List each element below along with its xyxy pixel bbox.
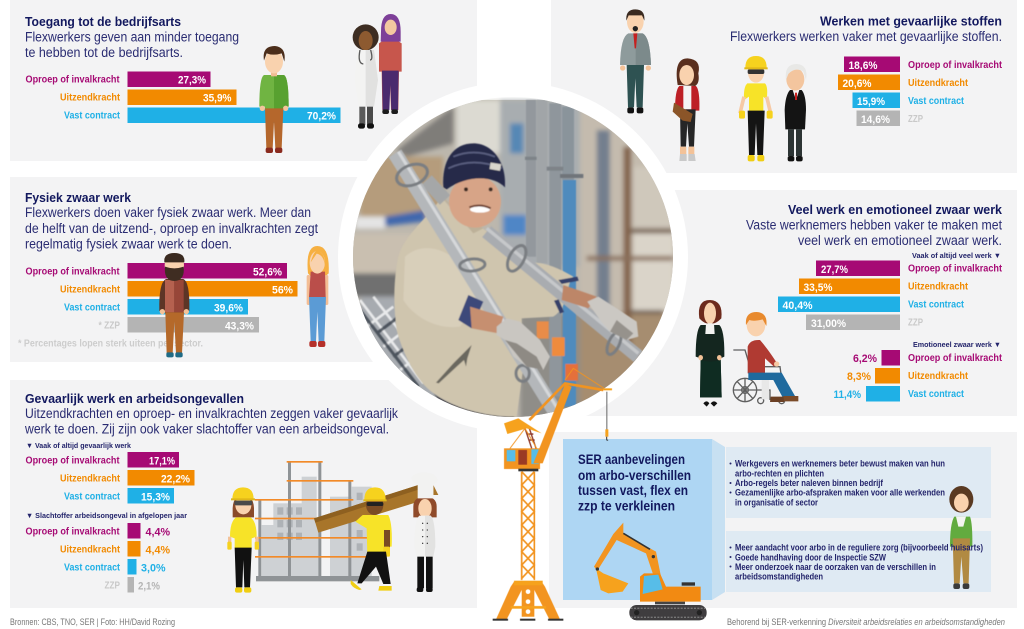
bar chart: gevaarlijke stoffen: Vast contract (908, 95, 964, 107)
figure: woman with green sweater (949, 486, 973, 589)
bar chart: vaak of altijd veel werk: Uitzendkracht (908, 280, 968, 292)
bar chart: fysiek zwaar werk: Uitzendkracht (60, 284, 120, 296)
bar chart: vaak of altijd gevaarlijk werk (26, 441, 194, 504)
bar chart: slachtoffer arbeidsongeval: Oproep of invalkracht (26, 526, 120, 538)
bar chart: fysiek zwaar werk: 43,3% (225, 320, 254, 332)
bar chart: slachtoffer arbeidsongeval: Uitzendkracht (60, 544, 120, 556)
bar chart: toegang bedrijfsarts: 70,2% (307, 110, 336, 122)
block: veel werk tekst (746, 202, 1003, 248)
figure: man in grey suit (620, 9, 651, 113)
bar chart: vaak of altijd gevaarlijk werk: 15,3% (141, 492, 170, 504)
list: aanbevelingen werkgevers: Arbo-regels beter naleven binnen bedrijf (735, 478, 884, 488)
white ring around photo (338, 82, 688, 432)
bar chart: emotioneel zwaar werk (834, 340, 1002, 402)
panel: fysiek zwaar werk (10, 177, 477, 362)
bar chart: slachtoffer arbeidsongeval: Vast contract (64, 562, 120, 574)
heading: SER aanbevelingen: SER aanbevelingen (578, 452, 685, 467)
bar chart: toegang bedrijfsarts: Oproep of invalkracht (26, 74, 120, 86)
list: aanbevelingen zorg en handhaving: arbeidsomstandigheden (735, 572, 823, 582)
bar chart: vaak of altijd gevaarlijk werk: Oproep of invalkracht (26, 454, 120, 466)
bar chart: emotioneel zwaar werk: Oproep of invalkracht (908, 352, 1002, 364)
bar chart: emotioneel zwaar werk: Vast contract (908, 388, 964, 400)
bar chart: fysiek zwaar werk: 39,6% (214, 302, 243, 314)
list: aanbevelingen zorg en handhaving: Meer aandacht voor arbo in de reguliere zorg (bijvoorbeeld huisarts) (735, 543, 983, 553)
bar chart: fysiek zwaar werk: * ZZP (98, 320, 120, 332)
bar chart: slachtoffer arbeidsongeval: ▼ Slachtoffer arbeidsongeval in afgelopen jaar (26, 511, 187, 520)
panel: SER aanbevelingen achtergrond (549, 432, 1017, 608)
figure: man in green sweater (259, 46, 289, 153)
panel: werken met gevaarlijke stoffen (551, 0, 1017, 173)
bar chart: slachtoffer arbeidsongeval: 4,4% (146, 526, 170, 538)
footer: bronnen: Bronnen: CBS, TNO, SER | Foto: HH/David Rozing (10, 617, 175, 627)
bar chart: vaak of altijd gevaarlijk werk: ▼ Vaak of altijd gevaarlijk werk (26, 441, 132, 450)
figure: woman with headscarf (379, 14, 402, 114)
bar chart: fysiek zwaar werk: 56% (272, 284, 293, 296)
bar chart: vaak of altijd gevaarlijk werk: Vast contract (64, 490, 120, 502)
block: toegang tot de bedrijfsarts tekst: te hebben tot de bedrijfsarts. (25, 45, 183, 60)
block: toegang tot de bedrijfsarts tekst: Flexwerkers geven aan minder toegang (25, 30, 239, 44)
bar chart: vaak of altijd veel werk: 40,4% (782, 300, 813, 312)
illustration: excavator (594, 523, 707, 620)
bar chart: slachtoffer arbeidsongeval: 4,4% (146, 544, 170, 556)
bar chart: vaak of altijd veel werk: Oproep of invalkracht (908, 262, 1002, 274)
heading: SER aanbevelingen: zzp te verkleinen (578, 498, 675, 514)
panel: veel werk en emotioneel zwaar werk (551, 190, 1017, 416)
bar chart: vaak of altijd veel werk: 31,00% (811, 318, 846, 330)
bar chart: emotioneel zwaar werk: 11,4% (834, 389, 861, 401)
bar chart: gevaarlijke stoffen: 20,6% (842, 78, 872, 90)
bar chart: fysiek zwaar werk: Vast contract (64, 302, 120, 314)
block: fysiek zwaar werk tekst: Fysiek zwaar werk (25, 190, 132, 205)
bar chart: gevaarlijke stoffen: 18,6% (848, 60, 878, 72)
bar chart: gevaarlijke stoffen: 15,9% (857, 96, 885, 108)
bar chart: gevaarlijke stoffen: Oproep of invalkracht (908, 59, 1002, 71)
bar chart: toegang bedrijfsarts: Uitzendkracht (60, 92, 120, 104)
bar chart: emotioneel zwaar werk: Uitzendkracht (908, 370, 968, 382)
figure: man in wheelchair (733, 312, 798, 404)
bar chart: fysiek zwaar werk: 52,6% (253, 266, 282, 278)
block: gevaarlijk werk tekst: Gevaarlijk werk en arbeidsongevallen (25, 391, 244, 406)
bar chart: toegang bedrijfsarts: 35,9% (203, 92, 232, 104)
panel: toegang tot de bedrijfsarts (10, 0, 477, 161)
list box 1 (726, 447, 991, 518)
bar chart: slachtoffer arbeidsongeval (26, 511, 187, 592)
bar chart: vaak of altijd veel werk: Vaak of altijd veel werk ▼ (912, 251, 1001, 260)
list: aanbevelingen werkgevers: Gezamenlijke arbo-afspraken maken voor alle werkenden (735, 488, 945, 498)
bar chart: slachtoffer arbeidsongeval: 3,0% (141, 562, 166, 574)
blue box: SER aanbevelingen (563, 439, 712, 600)
block: toegang tot de bedrijfsarts tekst (25, 14, 239, 60)
bar chart: slachtoffer arbeidsongeval: ZZP (104, 580, 120, 592)
block: gevaarlijke stoffen tekst: Werken met gevaarlijke stoffen (820, 14, 1002, 28)
list: aanbevelingen werkgevers: arbo-rechten en plichten (735, 468, 824, 478)
block: veel werk tekst: Veel werk en emotioneel zwaar werk (788, 202, 1003, 217)
figure: worker in yellow shirt (739, 56, 773, 161)
panel: gevaarlijk werk en arbeidsongevallen (10, 380, 477, 608)
figure: blonde woman (307, 246, 329, 347)
bar chart: vaak of altijd veel werk: ZZP (908, 316, 923, 328)
figure: woman with hard hat (227, 487, 259, 593)
block: veel werk tekst: veel werk en emotioneel zwaar werk. (798, 233, 1002, 248)
block: veel werk tekst: Vaste werknemers hebben vaker te maken met (746, 218, 1002, 232)
bar chart: gevaarlijke stoffen: ZZP (908, 113, 923, 125)
blue box arrow shape (712, 439, 725, 600)
bar chart: gevaarlijke stoffen: Uitzendkracht (908, 77, 968, 89)
list: aanbevelingen werkgevers (730, 459, 945, 508)
bar chart: slachtoffer arbeidsongeval: 2,1% (138, 580, 160, 592)
figure: judge woman in black robe (696, 300, 724, 407)
block: fysiek zwaar werk tekst: Flexwerkers doen vaker fysiek zwaar werk. Meer dan (25, 205, 311, 220)
photo: lachende bouwvakker met steigerbuizen (340, 100, 690, 420)
bar chart: gevaarlijke stoffen (838, 56, 1002, 126)
figure: worker carrying plank (351, 487, 392, 591)
bar chart: vaak of altijd gevaarlijk werk: 22,2% (161, 474, 190, 486)
bar chart: vaak of altijd gevaarlijk werk: 17,1% (149, 456, 175, 468)
bar chart: emotioneel zwaar werk: Emotioneel zwaar werk ▼ (913, 340, 1001, 349)
illustration: crane (493, 368, 612, 621)
bar chart: vaak of altijd veel werk: 27,7% (821, 264, 848, 276)
list box 2 (726, 531, 991, 592)
bar chart: toegang bedrijfsarts: 27,3% (178, 74, 206, 86)
bar chart: toegang bedrijfsarts (26, 72, 340, 123)
bar chart: vaak of altijd veel werk: Vast contract (908, 298, 964, 310)
heading: SER aanbevelingen: om arbo-verschillen (578, 468, 691, 483)
block: fysiek zwaar werk tekst (25, 190, 318, 252)
figure: elderly man in black coat (785, 64, 806, 161)
block: toegang tot de bedrijfsarts tekst: Toegang tot de bedrijfsarts (25, 14, 181, 29)
bar chart: vaak of altijd gevaarlijk werk: Uitzendkracht (60, 472, 120, 484)
illustration: gebouw en steiger (255, 461, 379, 581)
block: gevaarlijk werk tekst: werk te doen. Zij zijn ook vaker slachtoffer van een arbeidsongeval. (24, 422, 389, 436)
figure: chef (412, 472, 437, 592)
bar chart: emotioneel zwaar werk: 8,3% (847, 371, 871, 383)
bar chart: toegang bedrijfsarts: Vast contract (64, 110, 120, 122)
block: gevaarlijke stoffen tekst (730, 14, 1002, 44)
block: gevaarlijk werk tekst: Uitzendkrachten en oproep- en invalkrachten zeggen vaker gevaarlijk (25, 406, 398, 421)
block: fysiek zwaar werk tekst: regelmatig fysiek zwaar werk te doen. (25, 236, 232, 252)
list: aanbevelingen werkgevers: in organisatie of sector (735, 498, 818, 508)
block: gevaarlijke stoffen tekst: Flexwerkers werken vaker met gevaarlijke stoffen. (730, 29, 1002, 44)
block: fysiek zwaar werk tekst: de helft van de uitzend-, oproep en invalkrachten zegt (25, 221, 318, 236)
bar chart: vaak of altijd veel werk: 33,5% (804, 282, 833, 294)
bar chart: fysiek zwaar werk: Oproep of invalkracht (26, 266, 120, 278)
figure: woman in red jacket with bag (673, 58, 699, 161)
bar chart: vaak of altijd veel werk (778, 251, 1002, 330)
block: gevaarlijk werk tekst (24, 391, 398, 436)
bar chart: gevaarlijke stoffen: 14,6% (861, 114, 890, 126)
figure: doctor (353, 24, 379, 129)
list: aanbevelingen zorg en handhaving: Goede handhaving door de Inspectie SZW (735, 552, 886, 562)
bar chart: fysiek zwaar werk (26, 263, 298, 332)
bar chart: emotioneel zwaar werk: 6,2% (853, 353, 877, 365)
figure: plank (314, 485, 438, 533)
list: aanbevelingen zorg en handhaving (730, 543, 983, 582)
list: aanbevelingen werkgevers: Werkgevers en werknemers beter bewust maken van hun (735, 459, 945, 469)
figure: bearded man (159, 253, 189, 357)
heading: SER aanbevelingen: tussen vast, flex en (578, 483, 688, 498)
footnote: percentages: * Percentages lopen sterk uiteen per sector. (18, 338, 203, 350)
heading: SER aanbevelingen (578, 452, 691, 514)
list: aanbevelingen zorg en handhaving: Meer onderzoek naar de oorzaken van de verschillen in (735, 562, 936, 572)
